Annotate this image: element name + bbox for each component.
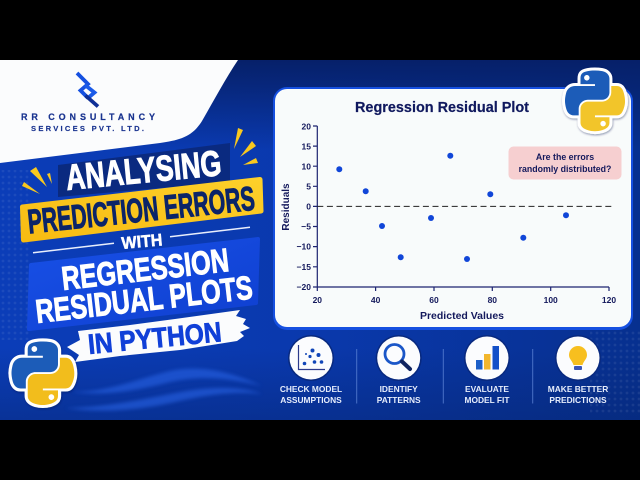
heading: regression residual plots bbox=[29, 239, 258, 330]
icon: RR logo mark bbox=[77, 73, 98, 106]
y axis tick labels: 10 bbox=[302, 162, 311, 172]
y axis tick labels: 0 bbox=[306, 202, 311, 212]
icon: magnifying glass bbox=[385, 344, 410, 369]
x axis tick labels: 80 bbox=[488, 295, 497, 305]
label: EVALUATE bbox=[465, 384, 509, 394]
company name: RR CONSULTANCY bbox=[21, 112, 155, 122]
callout bbox=[508, 146, 622, 180]
y axis tick labels: 20 bbox=[302, 122, 311, 132]
heading: prediction errors bbox=[22, 180, 261, 241]
heading: in python brush stroke: IN PYTHON bbox=[87, 316, 223, 360]
y axis tick labels: 15 bbox=[302, 142, 311, 152]
x axis tick labels: 40 bbox=[371, 295, 381, 305]
benefit: identify patterns bbox=[376, 335, 422, 405]
label: ASSUMPTIONS bbox=[280, 395, 342, 405]
y axis tick labels: −15 bbox=[297, 262, 311, 272]
y axis tick labels: −20 bbox=[297, 282, 311, 292]
y axis tick labels: −10 bbox=[297, 242, 311, 252]
axes bbox=[313, 126, 609, 291]
white logo panel bbox=[0, 60, 238, 163]
panel: residual plot card bbox=[273, 87, 633, 330]
label: IDENTIFY bbox=[380, 384, 418, 394]
heading: with bbox=[33, 227, 250, 253]
heading: analysing: ANALYSING bbox=[64, 142, 223, 198]
callout: randomly distributed? bbox=[519, 164, 611, 174]
heading: regression residual plots: RESIDUAL PLOTS bbox=[34, 269, 254, 330]
x axis tick labels: 60 bbox=[429, 295, 439, 305]
background bbox=[0, 60, 640, 420]
label: MAKE BETTER bbox=[548, 384, 608, 394]
icon: scatter axes bbox=[298, 345, 325, 370]
icon: yellow burst rays bbox=[22, 128, 258, 194]
icon: python logo top right bbox=[565, 70, 625, 131]
company logo bbox=[21, 73, 155, 133]
icon: bar chart bbox=[476, 346, 499, 370]
decorative waves bbox=[65, 369, 262, 411]
label: PATTERNS bbox=[377, 395, 421, 405]
y axis tick labels: −5 bbox=[301, 222, 311, 232]
x axis tick labels bbox=[313, 295, 616, 305]
label: CHECK MODEL bbox=[280, 384, 342, 394]
chart title: Regression Residual Plot bbox=[355, 100, 529, 116]
x axis label: Predicted Values bbox=[420, 310, 504, 322]
y axis tick labels: 5 bbox=[306, 182, 311, 192]
y axis label: Residuals bbox=[281, 183, 292, 231]
benefit: make better predictions bbox=[548, 335, 608, 405]
scatter chart bbox=[281, 122, 616, 322]
heading: regression residual plots: REGRESSION bbox=[60, 241, 231, 297]
label: MODEL FIT bbox=[465, 395, 510, 405]
x axis tick labels: 100 bbox=[544, 295, 558, 305]
label: PREDICTIONS bbox=[549, 395, 607, 405]
icon: python logo bottom left bbox=[12, 341, 74, 405]
icon: light bulb bbox=[569, 346, 587, 370]
heading: prediction errors: PREDICTION ERRORS bbox=[26, 180, 257, 241]
heading: with: WITH bbox=[121, 230, 163, 253]
benefit: evaluate model fit bbox=[464, 335, 510, 405]
y axis tick labels bbox=[297, 122, 311, 292]
callout: Are the errors bbox=[536, 152, 594, 162]
x axis tick labels: 20 bbox=[313, 295, 322, 305]
company subtitle: SERVICES PVT. LTD. bbox=[31, 124, 144, 133]
benefit: check model assumptions bbox=[280, 335, 342, 405]
zero reference line bbox=[317, 205, 612, 207]
x axis tick labels: 120 bbox=[602, 295, 616, 305]
data points bbox=[336, 153, 569, 262]
